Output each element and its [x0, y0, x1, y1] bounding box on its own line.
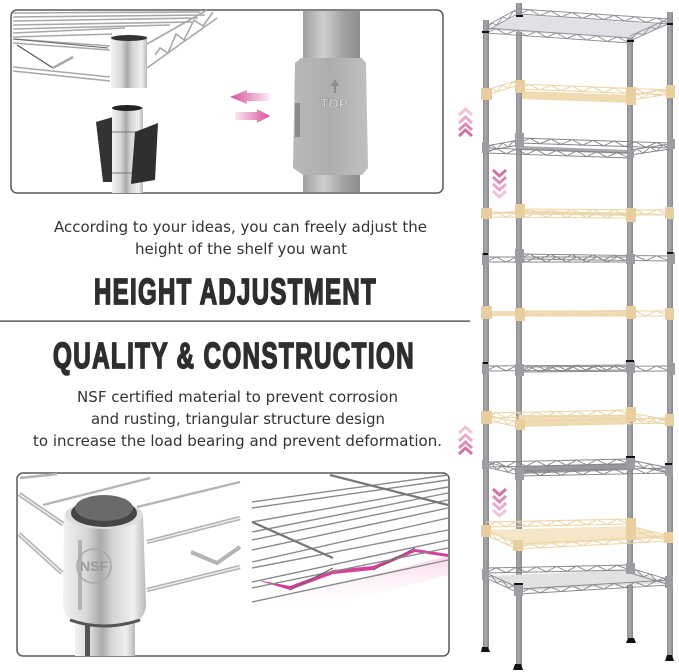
chevrons: up upper: [459, 109, 472, 136]
clip and post: [96, 105, 158, 193]
shelf 8 tan: [481, 407, 674, 430]
wire shelf corner: [13, 10, 217, 88]
heading: quality and construction: QUALITY & CONSTRUCTION: [53, 335, 415, 376]
shelf 11: [482, 563, 673, 596]
panel frame: [11, 10, 443, 193]
NSF post close-up: [19, 474, 240, 656]
chevrons: down lower: [493, 489, 506, 516]
panel: construction detail: [17, 473, 449, 656]
text: quality description: [33, 388, 442, 450]
text: quality description: NSF certified material to prevent corrosion: [77, 388, 398, 406]
NSF mark: NSF: [80, 558, 108, 574]
text: quality description: and rusting, triangular structure design: [91, 410, 385, 428]
large grey post and sleeve: [293, 11, 368, 192]
wire mesh with triangular structure: [252, 475, 448, 612]
shelf 10 tan: [481, 518, 673, 551]
TOP embossed text: TOP: [320, 96, 348, 111]
shelf 1: [482, 8, 673, 43]
chevrons: up lower: [459, 427, 472, 454]
shelf 5: [482, 249, 675, 265]
shelf 7: [482, 360, 675, 376]
shelf 9: [482, 456, 673, 480]
feet: [481, 638, 674, 670]
chevrons: down upper: [493, 170, 506, 197]
text: height adjustment description: [54, 218, 427, 258]
text: quality description: to increase the load bearing and prevent deformation.: [33, 432, 442, 450]
rack: posts: [481, 3, 674, 670]
text: height adjustment description: height of the shelf you want: [135, 240, 347, 258]
shelf 6 tan: [481, 306, 674, 321]
panel: shelf connector detail: [11, 10, 443, 193]
double arrows: [230, 90, 270, 123]
shelf 2 tan: [481, 80, 675, 105]
text: height adjustment description: According to your ideas, you can freely adjust the: [54, 218, 427, 236]
shelf 4 tan: [481, 204, 674, 222]
panel frame: [17, 473, 449, 656]
heading: height adjustment: HEIGHT ADJUSTMENT: [94, 271, 377, 312]
shelf 3: [482, 133, 675, 158]
